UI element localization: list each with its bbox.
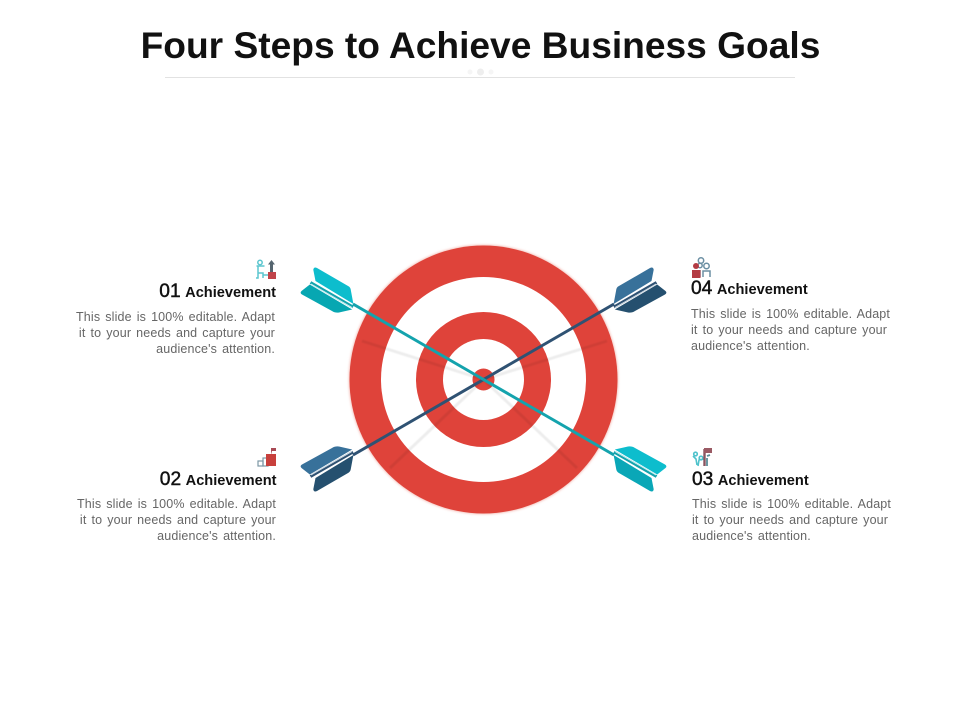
step description bbox=[76, 310, 275, 356]
panel: step 04 bbox=[691, 257, 890, 353]
step description: it to your needs and capture your bbox=[691, 323, 887, 337]
panel: step 03 bbox=[692, 448, 891, 543]
step description bbox=[691, 307, 890, 353]
panel: step 02 bbox=[77, 448, 276, 543]
arrow: bottom-left navy bbox=[301, 380, 484, 491]
step description: it to your needs and capture your bbox=[692, 513, 888, 527]
target rings bbox=[349, 245, 618, 514]
arrow: top-right navy bbox=[484, 268, 666, 380]
step description bbox=[692, 497, 891, 543]
step heading: 01 Achievement bbox=[159, 281, 276, 302]
title: Four Steps to Achieve Business Goals bbox=[141, 24, 820, 66]
step description: This slide is 100% editable. Adapt bbox=[691, 307, 890, 321]
step description: This slide is 100% editable. Adapt bbox=[77, 497, 276, 511]
step description: it to your needs and capture your bbox=[79, 326, 275, 340]
icon: team with flag bbox=[692, 448, 712, 466]
step description: This slide is 100% editable. Adapt bbox=[692, 497, 891, 511]
step description: audience's attention. bbox=[692, 529, 811, 543]
step description: This slide is 100% editable. Adapt bbox=[76, 310, 275, 324]
arrow: top-left teal bbox=[301, 268, 484, 380]
title divider bbox=[165, 68, 795, 78]
icon: rising steps with flag bbox=[257, 448, 276, 467]
step description: it to your needs and capture your bbox=[80, 513, 276, 527]
arrow: bottom-right teal bbox=[484, 380, 666, 491]
step description bbox=[77, 497, 276, 543]
step heading: 02 Achievement bbox=[160, 469, 276, 490]
icon: group of people bbox=[692, 257, 711, 278]
icon: person and arrow bbox=[256, 260, 276, 279]
arrow shadows bbox=[362, 341, 607, 468]
step description: audience's attention. bbox=[156, 342, 275, 356]
panel: step 01 bbox=[76, 260, 276, 356]
step heading: 03 Achievement bbox=[692, 469, 809, 490]
step heading: 04 Achievement bbox=[691, 278, 808, 299]
step description: audience's attention. bbox=[691, 339, 810, 353]
step description: audience's attention. bbox=[157, 529, 276, 543]
